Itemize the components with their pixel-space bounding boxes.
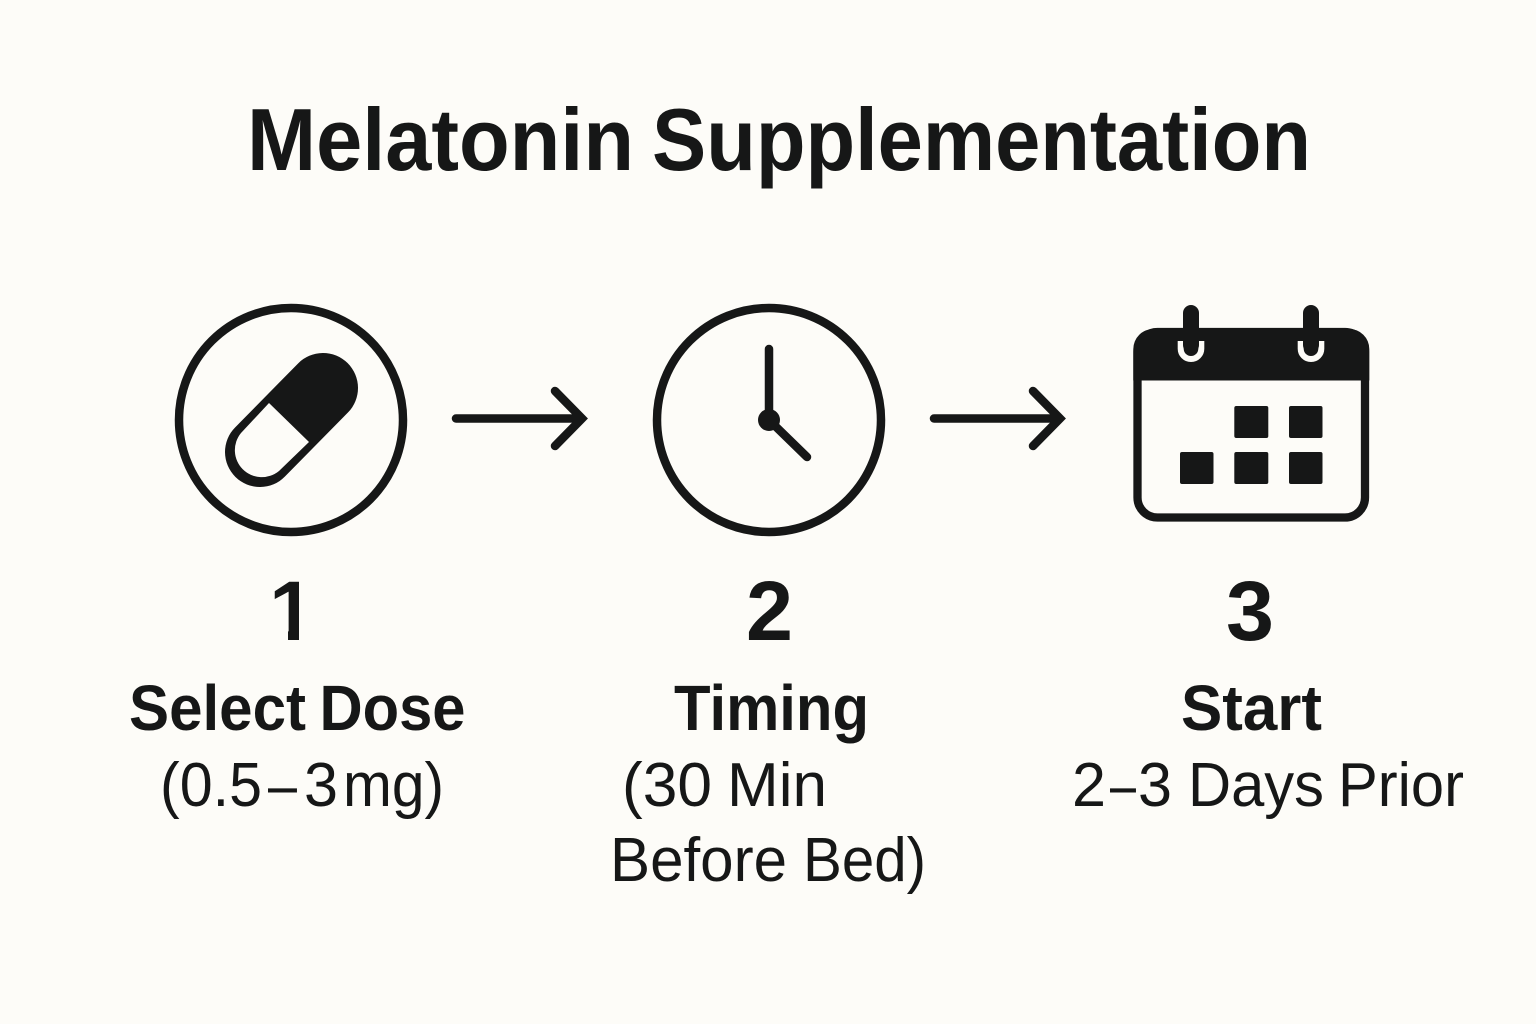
step 1 text: – — [268, 751, 297, 820]
step 1 text — [129, 564, 466, 820]
icon: clock — [657, 308, 881, 532]
step 2 text: Min — [727, 751, 827, 820]
step 1 text: (0.5 — [160, 751, 262, 820]
step 3 text: 2 — [1072, 751, 1106, 820]
step 3 text: 3 — [1226, 564, 1274, 658]
icon: pill in circle — [179, 308, 403, 532]
step 2 text: Before — [610, 826, 787, 895]
step 1 text: Select — [129, 672, 306, 744]
step 3 text: 3 — [1138, 751, 1172, 820]
step 2 text — [610, 564, 926, 895]
title: Supplementation — [652, 90, 1311, 189]
step 2 text: Bed) — [803, 826, 926, 895]
step 1 text: Dose — [320, 672, 466, 744]
arrow 1 — [456, 391, 582, 446]
step 1 text: 1 — [269, 564, 316, 658]
step 3 text — [1072, 564, 1464, 820]
step 3 text: Start — [1181, 672, 1322, 744]
step 3 text: – — [1110, 751, 1136, 820]
step 1 text: 3 — [304, 751, 338, 820]
step 1 text: mg) — [343, 751, 444, 820]
arrow 2 — [934, 391, 1060, 446]
step 3 text: Days — [1188, 751, 1324, 820]
step 3 text: Prior — [1338, 751, 1464, 820]
step 2 text: 2 — [746, 564, 793, 658]
step 2 text: (30 — [622, 751, 712, 820]
title: Melatonin — [247, 90, 634, 189]
step 2 text: Timing — [674, 672, 869, 744]
icon: calendar — [1133, 313, 1369, 518]
